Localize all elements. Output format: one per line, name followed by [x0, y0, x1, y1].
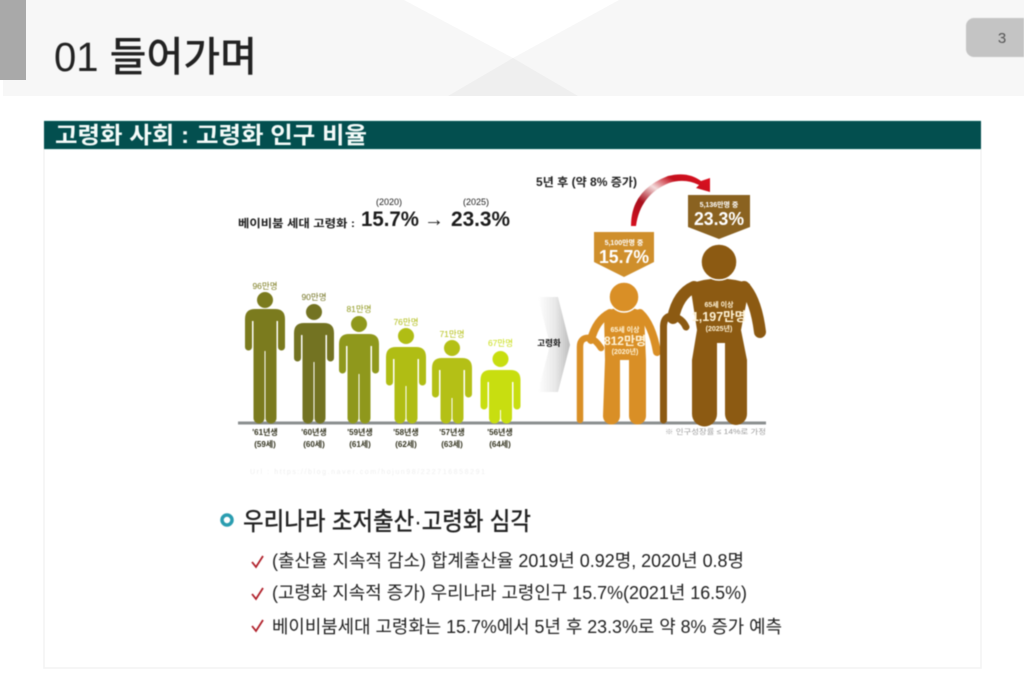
footnote: ※ 인구성장률 ≤ 14%로 가정 — [665, 427, 766, 436]
birth year labels: (61세) — [349, 439, 371, 449]
headline ratio — [238, 197, 510, 231]
source url: Url : https://blog.naver.com/hojun98/222716858291 — [250, 469, 485, 476]
arrow: red curve — [631, 174, 710, 226]
label: five years later: 5년 후 (약 8% 증가) — [536, 175, 637, 189]
figure: 1957 births: 71만명 — [439, 329, 465, 339]
bullet ring — [222, 515, 232, 525]
figure: 1956 births — [480, 338, 520, 424]
arrow: ageing: 고령화 — [537, 338, 561, 348]
point 2: (고령화 지속적 증가) 우리나라 고령인구 15.7%(2021년 16.5%) — [272, 583, 747, 603]
birth year labels: (63세) — [441, 439, 463, 449]
figure: elderly 2020: (2020년) — [612, 347, 638, 356]
birth year labels: '57년생 — [439, 427, 465, 437]
section heading bar: 고령화 사회 : 고령화 인구 비율 — [55, 122, 367, 148]
headline ratio: (2025) — [463, 197, 489, 207]
baseline — [238, 422, 766, 424]
page number tab: 3 — [998, 30, 1006, 47]
figure: 1960 births — [294, 292, 334, 424]
birth year labels: (62세) — [395, 439, 417, 449]
badge: 15.7%: 15.7% — [599, 247, 649, 267]
figure: elderly 2020: 65세 이상 — [610, 325, 640, 334]
title: 01 들어가며 — [54, 34, 257, 80]
figure: elderly 2020 — [580, 282, 657, 424]
section heading bar — [44, 120, 981, 150]
birth year labels: (59세) — [254, 439, 276, 449]
headline ratio: 23.3% — [451, 208, 510, 231]
figure: elderly 2025 — [664, 244, 760, 426]
content panel outline — [44, 149, 981, 668]
badge: 15.7%: 5,100만명 중 — [605, 238, 644, 247]
birth year labels: '59년생 — [347, 427, 373, 437]
badge: 23.3%: 5,136만명 중 — [700, 200, 739, 209]
birth year labels: '58년생 — [393, 427, 419, 437]
figure: 1957 births — [432, 329, 472, 424]
key point heading: 우리나라 초저출산·고령화 심각 — [243, 508, 531, 536]
figure: elderly 2025: 1,197만명 — [692, 310, 746, 324]
figure: 1961 births — [245, 281, 285, 424]
header band — [0, 0, 1024, 96]
headline ratio: 15.7% — [361, 208, 419, 231]
figure: 1959 births — [339, 304, 379, 424]
badge: 15.7% — [594, 232, 654, 277]
figure: elderly 2025: (2025년) — [706, 324, 732, 333]
infographic: baby boomer ageing — [238, 174, 766, 476]
page number tab — [966, 18, 1024, 57]
figure: 1958 births — [386, 317, 426, 424]
arrow: ageing — [537, 297, 570, 392]
figure: 1961 births: 96만명 — [252, 281, 278, 291]
headline ratio: → — [424, 209, 444, 231]
key points — [222, 508, 782, 637]
figure: elderly 2020: 812만명 — [604, 334, 646, 348]
birth year labels: '56년생 — [487, 427, 513, 437]
birth year labels — [252, 427, 513, 449]
birth year labels: '60년생 — [301, 427, 327, 437]
badge: 23.3% — [688, 195, 750, 239]
figure: 1956 births: 67만명 — [488, 338, 513, 348]
figure: 1960 births: 90만명 — [301, 292, 327, 302]
birth year labels: (60세) — [303, 439, 325, 449]
figure: 1959 births: 81만명 — [346, 304, 372, 314]
figure: elderly 2025: 65세 이상 — [704, 300, 734, 309]
birth year labels: '61년생 — [252, 427, 278, 437]
headline ratio: (2020) — [376, 197, 402, 207]
headline ratio: 베이비붐 세대 고령화 : — [238, 216, 355, 230]
badge: 23.3%: 23.3% — [694, 209, 744, 229]
birth year labels: (64세) — [489, 439, 511, 449]
point 1: (출산율 지속적 감소) 합계출산율 2019년 0.92명, 2020년 0.8명 — [272, 551, 744, 571]
point 3: 베이비붐세대 고령화는 15.7%에서 5년 후 23.3%로 약 8% 증가 예측 — [272, 617, 782, 637]
figure: 1958 births: 76만명 — [393, 317, 419, 327]
